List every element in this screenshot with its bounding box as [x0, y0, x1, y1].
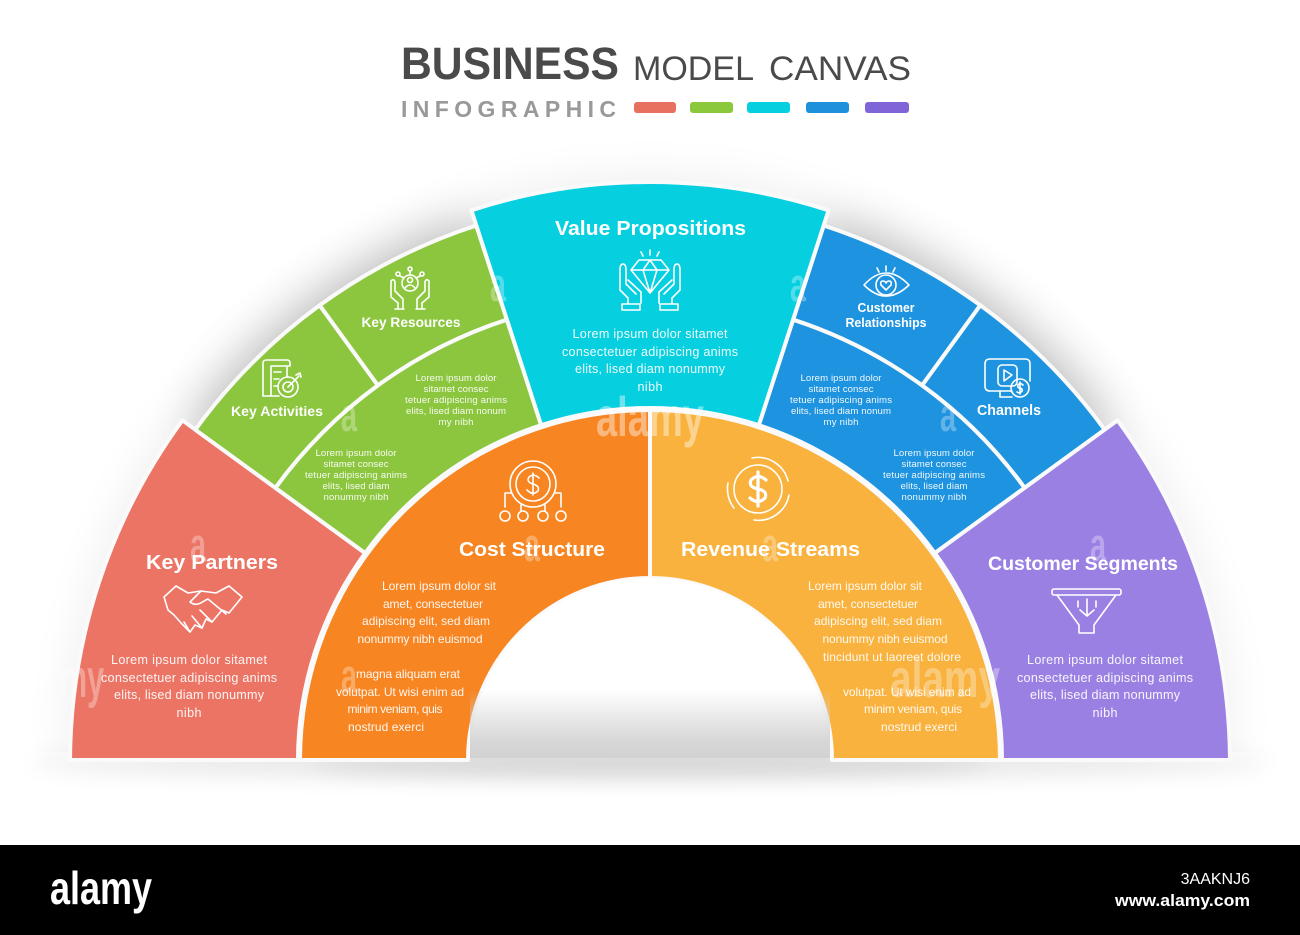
colour legend bars: [634, 102, 909, 113]
icon: dollar coin with orbit rings: [727, 457, 789, 520]
icon: checklist with target: [263, 360, 301, 397]
icon: handshake: [164, 586, 242, 632]
panel: activities and resources description: nonummy nibh: [324, 492, 388, 503]
panel: relationships and channels description: Lorem ipsum dolor: [894, 448, 975, 459]
panel: customer segments: elits, lised diam nonummy: [1030, 688, 1181, 702]
panel: customer relationships: [793, 226, 980, 385]
panel: activities and resources description: Lorem ipsum dolor: [316, 448, 397, 459]
title: CANVAS: [769, 50, 911, 88]
stock watermarks: a: [940, 388, 957, 441]
panel: activities and resources description: sitamet consec: [424, 384, 489, 395]
panel: cost structure: magna aliquam erat: [356, 667, 461, 681]
footer url: www.alamy.com: [1114, 892, 1250, 910]
panel: key partners: Lorem ipsum dolor sitamet: [111, 653, 268, 667]
panel: relationships and channels description: tetuer adipiscing anims: [883, 470, 985, 481]
panel: value propositions: [471, 182, 829, 425]
stock watermarks: [60, 258, 1107, 709]
title: BUSINESS: [401, 38, 619, 89]
panel: cost structure: adipiscing elit, sed diam: [362, 614, 490, 628]
panel: revenue streams: minim veniam, quis: [864, 702, 962, 716]
title: [401, 38, 911, 89]
panel: activities and resources description: my nibh: [438, 417, 474, 428]
footer logo: alamy: [50, 862, 152, 914]
panel: channels: Channels: [977, 403, 1041, 419]
stock watermarks: my: [60, 649, 104, 709]
panel: revenue streams: Revenue Streams: [681, 539, 860, 561]
panel: channels: [922, 305, 1105, 488]
panel: activities and resources description: Lorem ipsum dolor: [416, 373, 497, 384]
icon: diamond in hands: [620, 250, 680, 310]
panel: activities and resources description: tetuer adipiscing anims: [405, 395, 507, 406]
drop shadows: [0, 182, 1300, 845]
panel: revenue streams: volutpat. Ut wisi enim ad: [843, 685, 971, 699]
panel: relationships and channels description: elits, lised diam: [900, 481, 968, 492]
stock watermarks: a: [524, 518, 541, 571]
panel: value propositions: elits, lised diam nonummy: [575, 362, 726, 376]
panel: key resources: Key Resources: [362, 315, 460, 330]
panel: revenue streams: Lorem ipsum dolor sit: [808, 579, 923, 593]
icon: person in hands: [391, 267, 429, 309]
panel: customer segments: consectetuer adipiscing anims: [1017, 671, 1193, 685]
image id: 3AAKNJ6: [1181, 871, 1250, 888]
panel: customer segments: [935, 420, 1230, 760]
panel: key partners: Key Partners: [146, 552, 278, 574]
panel: activities and resources description: tetuer adipiscing anims: [305, 470, 407, 481]
panel: cost structure: Cost Structure: [459, 539, 605, 561]
panel: relationships and channels description: my nibh: [824, 417, 858, 428]
panel: customer segments: Lorem ipsum dolor sitamet: [1027, 653, 1184, 667]
panel: relationships and channels description: Lorem ipsum dolor: [800, 373, 882, 384]
panel: value propositions: Value Propositions: [555, 217, 746, 240]
stock watermarks: a: [341, 388, 358, 441]
stock watermarks: alamy: [596, 385, 704, 448]
stock watermarks: a: [190, 518, 207, 571]
icon: video screen with dollar: [985, 359, 1030, 397]
panel: customer relationships: Customer: [858, 301, 915, 315]
title: MODEL: [633, 50, 754, 88]
panel: key activities: [195, 305, 378, 553]
panel: activities and resources description: elits, lised diam nonum: [406, 406, 506, 417]
panel: key partners: [70, 420, 365, 760]
panel: revenue streams: adipiscing elit, sed diam: [814, 614, 942, 628]
panel: customer segments: nibh: [1092, 706, 1118, 720]
footer band: [0, 845, 1300, 935]
panel: revenue streams: nostrud exerci: [881, 720, 957, 734]
panel: relationships and channels description: sitamet consec: [808, 384, 874, 395]
panel: cost structure: [300, 410, 650, 760]
panel: relationships and channels description: [759, 320, 1025, 553]
panel: value propositions: nibh: [638, 380, 662, 394]
center hole shadow: [470, 578, 830, 758]
panel: activities and resources description: [275, 320, 541, 553]
panel: key partners: nibh: [176, 706, 202, 720]
panel: key resources: [320, 226, 507, 385]
icon: coin network: [500, 461, 566, 521]
panel: key partners: consectetuer adipiscing anims: [101, 671, 277, 685]
panel: cost structure: amet, consectetuer: [383, 597, 483, 611]
panel: cost structure: nonummy nibh euismod: [358, 632, 482, 646]
panel: cost structure: nostrud exerci: [348, 720, 424, 734]
panel: activities and resources description: sitamet consec: [324, 459, 389, 470]
stock watermarks: a: [490, 258, 507, 311]
stock watermarks: a: [1090, 518, 1107, 571]
icon: funnel: [1052, 589, 1121, 633]
panel: cost structure: volutpat. Ut wisi enim ad: [336, 685, 464, 699]
panel: customer segments: Customer Segments: [988, 553, 1178, 575]
panel: value propositions: consectetuer adipiscing anims: [562, 345, 738, 359]
panel: revenue streams: tincidunt ut laoreet dolore: [823, 650, 961, 664]
panel: cost structure: minim veniam, quis: [348, 702, 442, 716]
panel: revenue streams: nonummy nibh euismod: [822, 632, 948, 646]
panel: revenue streams: [650, 410, 1000, 760]
stock watermarks: alamy: [890, 649, 1000, 709]
panel: key partners: elits, lised diam nonummy: [114, 688, 265, 702]
panel: relationships and channels description: tetuer adipiscing anims: [790, 395, 892, 406]
panel: revenue streams: amet, consectetuer: [818, 597, 918, 611]
icon: eye with heart: [864, 266, 909, 296]
stock watermarks: a: [762, 518, 779, 571]
panel: relationships and channels description: nonummy nibh: [902, 492, 966, 503]
stock watermarks: a: [341, 649, 358, 702]
stock watermarks: a: [790, 258, 807, 311]
subtitle: INFOGRAPHIC: [401, 96, 616, 122]
panel: key activities: Key Activities: [231, 404, 323, 419]
panel: relationships and channels description: elits, lised diam nonum: [791, 406, 891, 417]
panel: activities and resources description: elits, lised diam: [322, 481, 390, 492]
panel: customer relationships: Relationships: [846, 315, 926, 330]
panel: relationships and channels description: sitamet consec: [902, 459, 967, 470]
panel: cost structure: Lorem ipsum dolor sit: [382, 579, 497, 593]
panel: value propositions: Lorem ipsum dolor sitamet: [572, 327, 728, 341]
